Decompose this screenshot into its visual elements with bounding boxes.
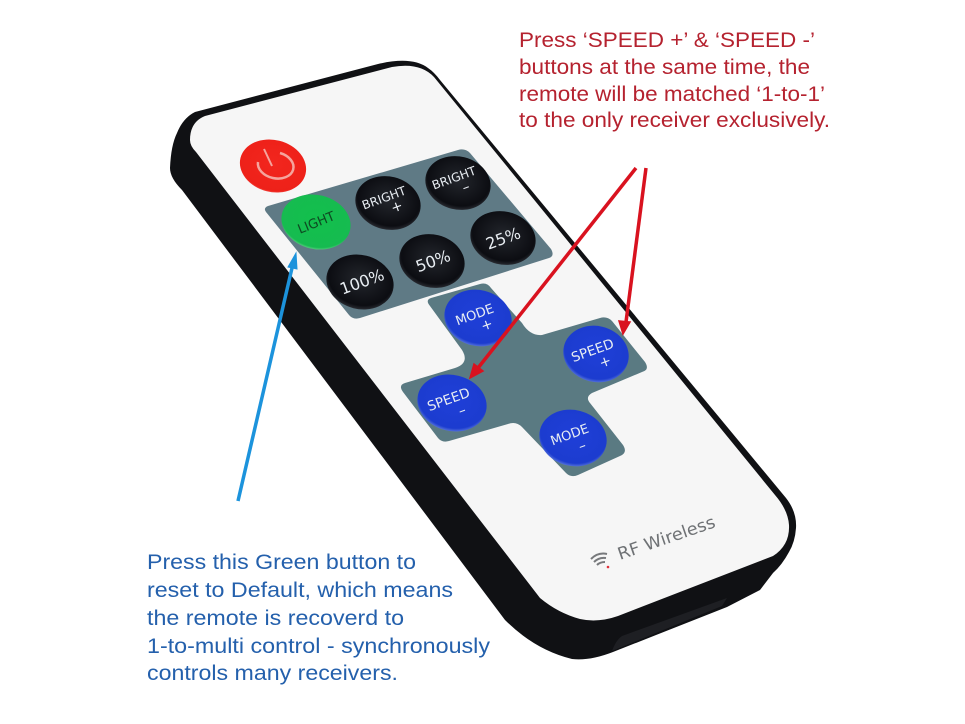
remote control xyxy=(170,61,796,659)
speed minus button: – xyxy=(456,402,468,420)
100 percent button: 100% xyxy=(337,265,387,299)
blue instruction text xyxy=(147,550,490,685)
red instruction text: remote will be matched ‘1-to-1’ xyxy=(519,82,825,106)
speed plus button: + xyxy=(597,353,614,372)
bright plus button: + xyxy=(389,198,405,217)
blue instruction text: controls many receivers. xyxy=(147,661,398,685)
blue instruction text: Press this Green button to xyxy=(147,550,416,574)
light button: LIGHT xyxy=(296,209,337,238)
bright minus button: – xyxy=(460,179,472,196)
remote black body xyxy=(170,61,796,659)
red instruction text: Press ‘SPEED +’ & ‘SPEED -’ xyxy=(519,28,815,52)
speed plus button: SPEED xyxy=(569,336,616,366)
50 percent button: 50% xyxy=(413,246,453,276)
speed minus button: SPEED xyxy=(425,385,472,415)
mode plus button: + xyxy=(479,316,495,335)
red instruction text xyxy=(519,28,830,132)
25 percent button xyxy=(465,204,541,272)
blue instruction text: 1-to-multi control - synchronously xyxy=(147,634,490,658)
RF Wireless label: RF Wireless xyxy=(615,513,718,565)
bright minus button: BRIGHT xyxy=(430,163,479,192)
red instruction text: buttons at the same time, the xyxy=(519,55,810,79)
speed minus button xyxy=(411,367,493,439)
bright plus button: BRIGHT xyxy=(360,183,409,212)
50 percent button xyxy=(394,227,470,295)
mode minus button: – xyxy=(576,438,588,455)
arrow: blue to green button xyxy=(238,253,297,501)
100 percent button xyxy=(320,248,400,316)
mode plus button xyxy=(438,283,518,353)
light button xyxy=(276,187,356,257)
side ridge on the lower edge xyxy=(612,598,727,651)
arrow: red to speed plus button xyxy=(619,168,646,334)
mode minus button xyxy=(533,403,613,473)
power button xyxy=(234,133,312,199)
bright plus button xyxy=(350,169,426,237)
red instruction text: to the only receiver exclusively. xyxy=(519,108,830,132)
blue instruction text: reset to Default, which means xyxy=(147,578,453,602)
bright minus button xyxy=(420,149,496,217)
remote white face xyxy=(190,66,789,620)
mode plus button: MODE xyxy=(454,302,496,329)
panel: brightness keypad xyxy=(265,149,553,319)
speed plus button xyxy=(557,319,635,389)
panel: mode and speed cross keypad xyxy=(401,283,647,476)
arrow: red to speed minus button xyxy=(470,168,636,378)
blue instruction text: the remote is recoverd to xyxy=(147,606,404,630)
mode minus button: MODE xyxy=(549,422,591,449)
25 percent button: 25% xyxy=(483,223,523,253)
